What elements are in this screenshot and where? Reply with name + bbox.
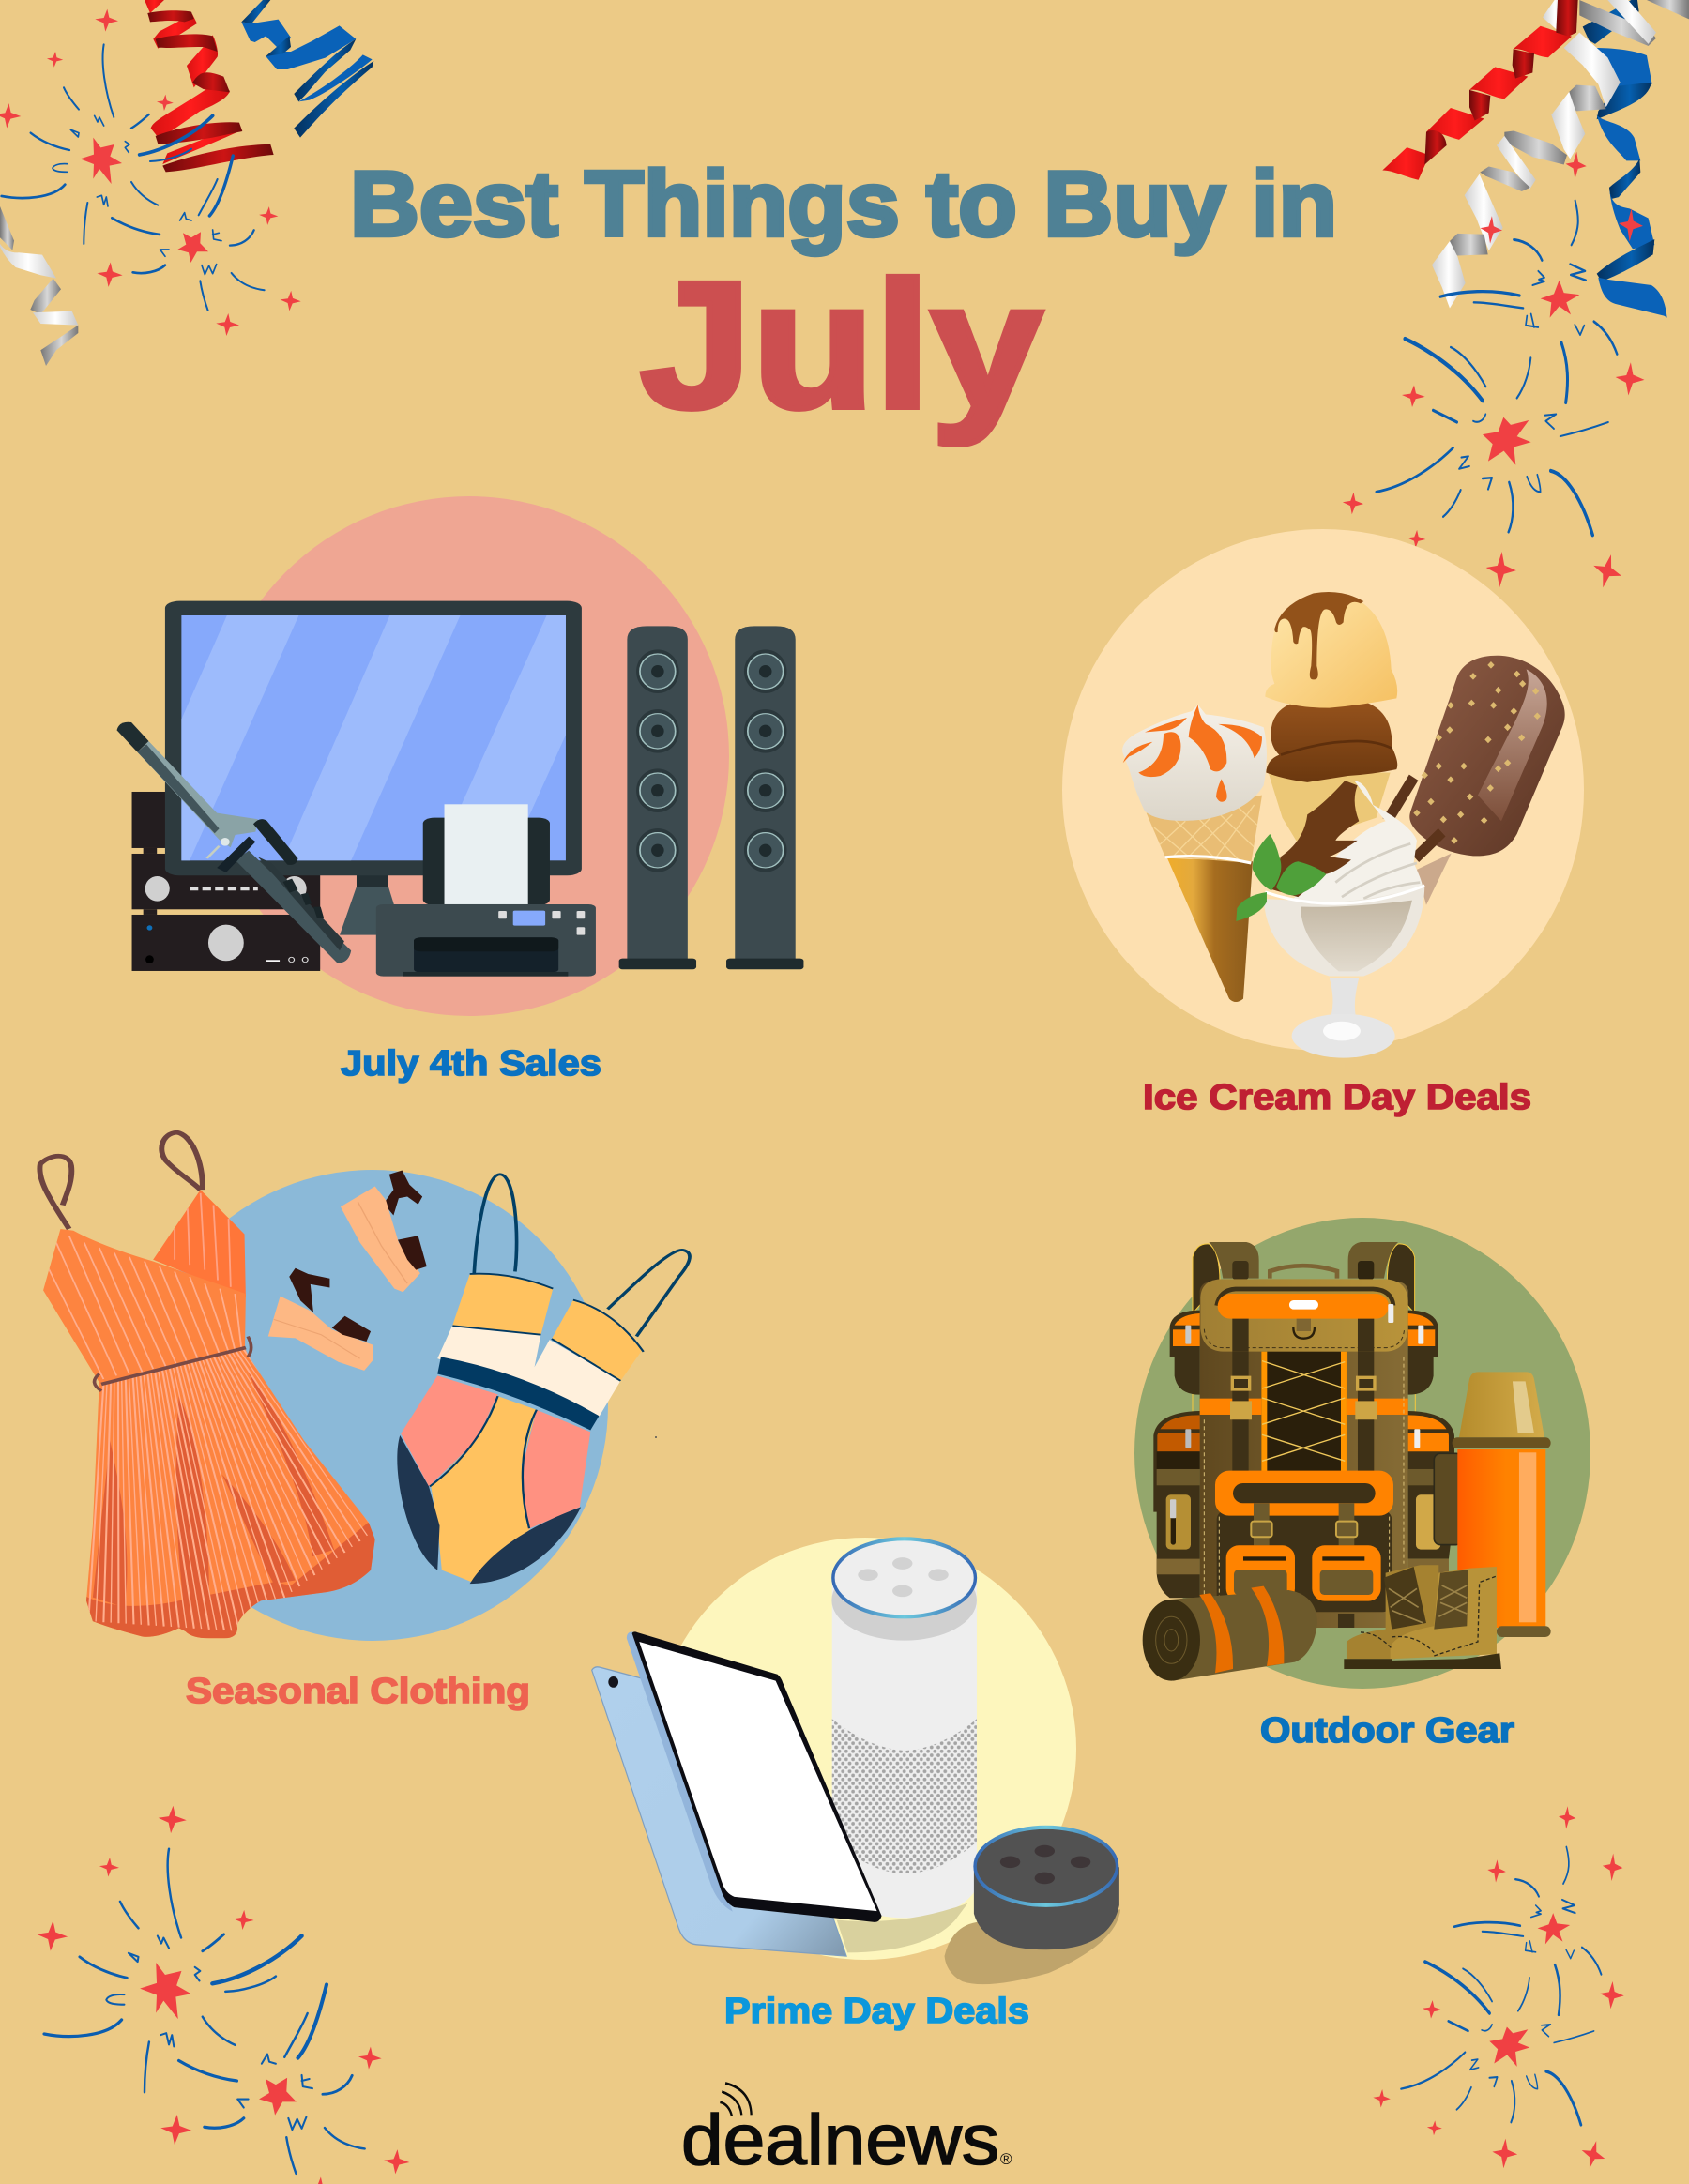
circle backdrop (654, 1538, 1076, 1960)
icon: smart speaker small (945, 1828, 1120, 1984)
ribbons: top-right streamers (1382, 0, 1689, 318)
circle backdrop (137, 1170, 608, 1641)
icon: television (165, 601, 582, 935)
panel: Outdoor Gear (1134, 1218, 1590, 1751)
label: Ice Cream Day Deals: Ice Cream Day Deals (1143, 1078, 1531, 1117)
icon: thermos (1434, 1372, 1551, 1637)
icon: rolled mat (1143, 1586, 1317, 1681)
panel: Prime Day Deals (592, 1538, 1120, 2031)
tiny speck (655, 1436, 657, 1438)
label: July 4th Sales: July 4th Sales (341, 1044, 601, 1084)
title line 1: Best Things to Buy in (350, 152, 1337, 255)
circle backdrop (1134, 1218, 1590, 1689)
icon: chocolate popsicle (1387, 656, 1565, 905)
icon: speaker left (619, 626, 696, 969)
icon: orange swirl cone (1122, 705, 1267, 1002)
icon: backpack (1153, 1242, 1454, 1628)
title (350, 152, 1337, 446)
panel: Seasonal Clothing (39, 1132, 690, 1711)
logo: dealnews (681, 2083, 1012, 2180)
registered mark: ® (1000, 2150, 1012, 2168)
label: Seasonal Clothing: Seasonal Clothing (186, 1672, 530, 1711)
icon: swimsuit (397, 1175, 690, 1584)
circle backdrop (1062, 529, 1584, 1051)
icon: wedge sandal upper (341, 1170, 427, 1292)
icon: smart speaker (831, 1539, 977, 1952)
label: Prime Day Deals: Prime Day Deals (724, 1992, 1029, 2031)
electronics illustration (117, 601, 803, 977)
icon: wedge sandal lower (268, 1268, 373, 1371)
icon: hair straightener (117, 722, 351, 963)
ice cream illustration (1122, 592, 1565, 1058)
panel: Ice Cream Day Deals (1062, 529, 1584, 1117)
icon: signal arcs (720, 2083, 752, 2116)
icon: orange dress (39, 1132, 379, 1642)
fireworks: top-right (1343, 152, 1644, 592)
fireworks: top-left (0, 9, 301, 336)
logo wordmark: dealnews (681, 2101, 999, 2180)
ribbons: top-left streamers (0, 0, 373, 366)
panel: July 4th Sales (117, 496, 803, 1084)
fireworks: bottom-left (37, 1806, 409, 2184)
title line 2: July (640, 244, 1042, 446)
icon: mint leaves (1236, 834, 1326, 921)
circle backdrop (209, 496, 729, 1016)
icon: speaker right (726, 626, 803, 969)
icon: two-scoop cone (1265, 592, 1397, 843)
outdoor gear illustration (1143, 1242, 1551, 1681)
icon: printer (376, 804, 596, 977)
clothing illustration (39, 1132, 690, 1642)
icon: stereo stack (132, 792, 320, 971)
icon: sundae bowl (1264, 781, 1424, 1058)
fireworks: bottom-right (1373, 1806, 1624, 2172)
icon: hiking boots (1344, 1565, 1501, 1669)
devices illustration (592, 1539, 1120, 1984)
label: Outdoor Gear: Outdoor Gear (1260, 1711, 1514, 1751)
icon: tablet (592, 1631, 882, 1956)
